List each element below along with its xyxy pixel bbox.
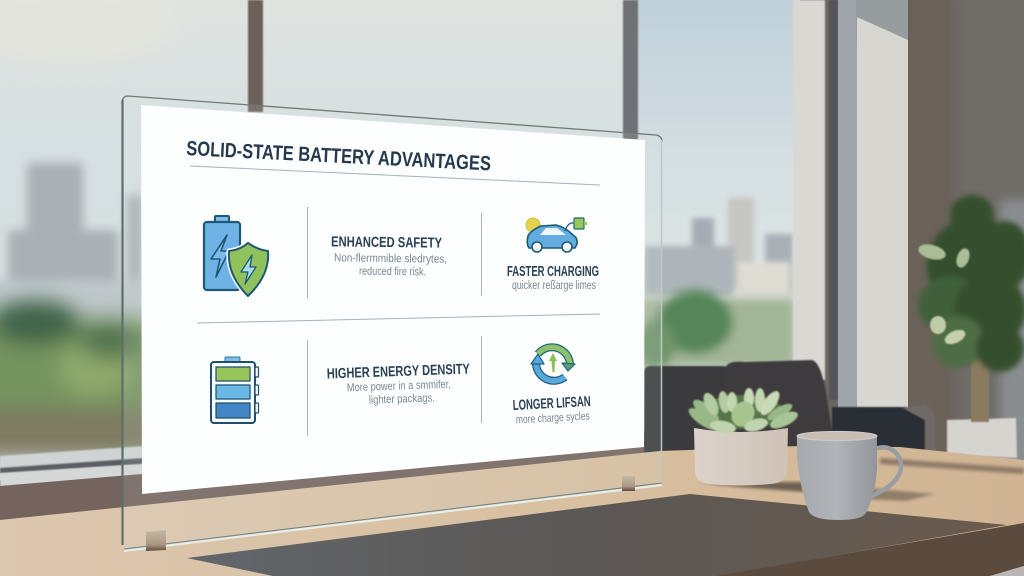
glow in the sky: [0, 0, 180, 65]
text: enhanced safety: reduced fire risk.: [359, 266, 426, 278]
succulent in pot: [686, 388, 805, 492]
coffee mug: [797, 432, 935, 520]
interior wall: [908, 0, 1024, 470]
glass left edge: [121, 100, 124, 545]
handle: [870, 447, 901, 497]
column divider bottom right: [480, 336, 482, 423]
background plant foliage: [918, 195, 1024, 372]
text: longer lifespan: [512, 394, 591, 426]
lower wall band: [0, 430, 660, 520]
glass right edge: [660, 140, 662, 484]
table surface: [0, 446, 1024, 576]
glass bottom edge: [124, 485, 662, 551]
glass top edge: [122, 96, 662, 142]
column divider top right: [480, 213, 482, 296]
window view: right pane sky: [636, 0, 796, 300]
sill lower band: [0, 464, 145, 487]
sill dark strip: [0, 458, 145, 474]
column dark gap: [829, 0, 838, 400]
floor corner: [990, 566, 1024, 576]
window mullion middle: [623, 0, 638, 140]
title: SOLID-STATE BATTERY ADVANTAGES: [186, 137, 492, 175]
window sill left: [0, 446, 145, 469]
pot: [694, 428, 788, 486]
text: longer lifespan: LONGER LIFSAN: [512, 394, 591, 414]
text: higher energy density: HIGHER ENERGY DENSITY: [327, 362, 470, 382]
text: enhanced safety: ENHANCED SAFETY: [331, 234, 442, 252]
blurred skyline right: [644, 198, 793, 298]
glass pane: [122, 96, 662, 550]
text: higher energy density: lighter packags.: [369, 392, 435, 407]
text: enhanced safety: Non-flermmible sledrytes,: [334, 252, 447, 266]
icon: battery with shield: [204, 216, 268, 296]
text: enhanced safety: [331, 234, 447, 278]
background plant highlights: [917, 242, 972, 347]
leaves: [686, 388, 800, 435]
rim: [797, 432, 877, 440]
blurred trees right: [635, 290, 795, 370]
white printed card: [141, 105, 645, 494]
light wall panel: [857, 17, 908, 410]
icon: layered battery: [211, 357, 258, 423]
white column: [793, 0, 825, 380]
background plant trunk: [971, 350, 989, 422]
blurred skyline left: [0, 163, 150, 320]
right stand foot: [622, 476, 635, 491]
table back shadow: [880, 458, 1024, 474]
row divider: [197, 314, 600, 323]
icon: lifespan cycle arrows: [531, 347, 575, 381]
text: faster charging: FASTER CHARGING: [507, 264, 599, 280]
grey reveal: [838, 0, 858, 410]
icon: electric car charging: [526, 218, 587, 252]
text: higher energy density: More power in a smmifer,: [347, 379, 451, 394]
blurred trees left: [0, 300, 160, 458]
column divider top left: [306, 207, 308, 298]
left stand foot: [146, 530, 166, 551]
column divider bottom left: [306, 340, 308, 436]
text: higher energy density: [327, 362, 470, 407]
background plant pot: [947, 418, 1017, 458]
title rule: [190, 166, 600, 185]
window mullion left: [248, 0, 263, 112]
window view: sky: [0, 0, 800, 480]
body: [797, 436, 877, 520]
sofa: [644, 360, 935, 456]
wooden table: [0, 446, 1024, 576]
text: faster charging: [507, 264, 599, 292]
table front edge: [716, 523, 1024, 576]
dark desk mat: [187, 494, 1007, 576]
pot shadow: [700, 482, 805, 492]
mug shadow: [862, 488, 935, 501]
glass panel: [122, 96, 662, 551]
text: longer lifespan: more charge sycles: [516, 411, 590, 426]
text: faster charging: quicker reßarge limes: [512, 280, 596, 292]
